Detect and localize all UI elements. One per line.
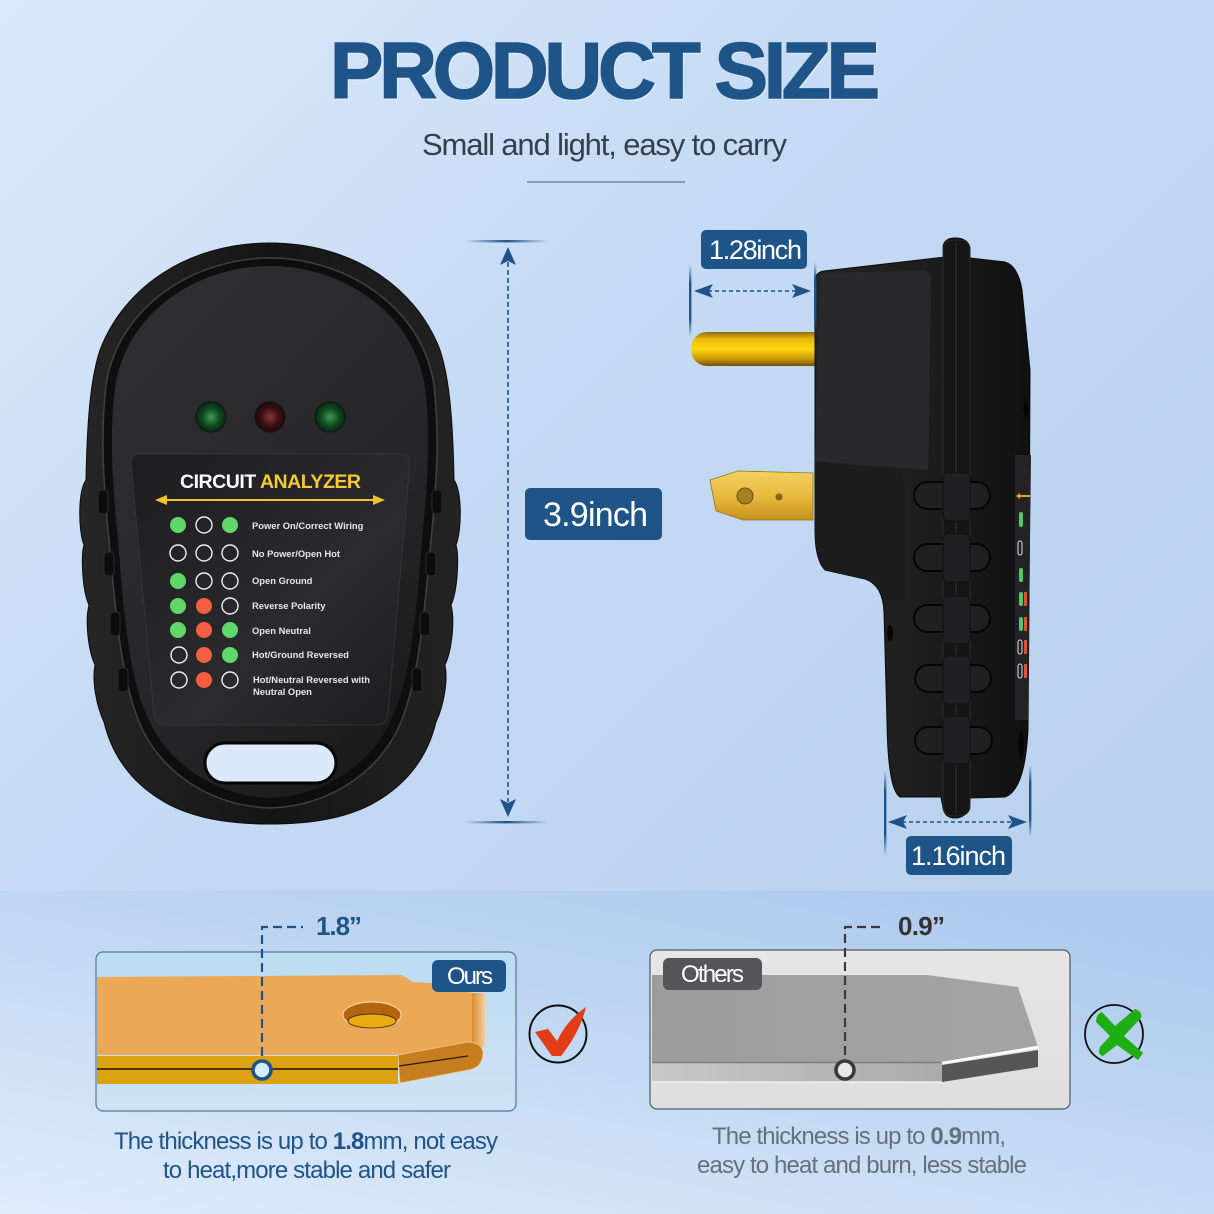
status row labels: Power On/Correct Wiring: [252, 520, 364, 531]
others panel frame: [650, 950, 1070, 1109]
thin blade marker: [836, 1061, 854, 1079]
thin blade leader line: [845, 927, 885, 1055]
height badge: [525, 488, 662, 540]
front face: [112, 266, 428, 798]
flange tabs over pills: [943, 473, 970, 764]
background: lower comparison band: [0, 891, 1214, 1214]
thickness value: 1.8”: [316, 911, 362, 941]
icon: check mark: [530, 1006, 586, 1062]
side body: [815, 238, 1030, 818]
status row labels: Reverse Polarity: [252, 600, 326, 611]
depth badge: 1.16inch: [911, 841, 1006, 871]
side rib tabs: [98, 490, 442, 692]
yellow double arrow: [155, 495, 385, 505]
indicator LEDs: [196, 402, 345, 432]
ours badge: Ours: [447, 963, 493, 990]
pin length badge: 1.28inch: [709, 235, 802, 265]
panel: ours comparison: [96, 911, 516, 1111]
label panel: [131, 454, 410, 725]
lower neck shading: [815, 461, 905, 600]
others badge: [663, 958, 762, 990]
caption: ours: to heat,more stable and safer: [163, 1157, 451, 1184]
body screw holes: [887, 402, 1028, 759]
others badge: Others: [681, 961, 744, 988]
background: upper section: [0, 0, 1214, 891]
label sliver: [1015, 455, 1031, 720]
grip pills: [914, 482, 992, 754]
caption: others: The thickness is up to 0.9mm,: [712, 1123, 1006, 1150]
thickness marker: [253, 1061, 271, 1079]
caption: ours: The thickness is up to 1.8mm, not easy: [114, 1128, 498, 1155]
height badge: 3.9inch: [543, 496, 648, 534]
caption: others: [697, 1123, 1027, 1179]
thin blade value: 0.9”: [898, 911, 945, 941]
icon: cross mark: [1085, 1005, 1143, 1063]
title: PRODUCT SIZE: [330, 26, 880, 115]
front view of circuit analyzer: [80, 243, 460, 824]
status row labels: Open Ground: [252, 575, 313, 586]
depth badge: [906, 836, 1012, 875]
caption: others: easy to heat and burn, less stable: [697, 1152, 1027, 1179]
status row labels: Neutral Open: [253, 686, 312, 697]
body depth dimension: [884, 765, 1031, 875]
ours badge: [432, 960, 506, 992]
status row labels: [252, 520, 370, 697]
round gold pin: [691, 332, 816, 366]
status row labels: Open Neutral: [252, 625, 311, 636]
copper blade image: [97, 975, 485, 1084]
status row dots: [170, 517, 238, 688]
ours panel frame: [96, 952, 516, 1111]
plug block: [815, 271, 931, 470]
subtitle: Small and light, easy to carry: [422, 127, 788, 162]
panel: others comparison: [650, 911, 1070, 1109]
caption: ours: [114, 1128, 498, 1184]
status row labels: No Power/Open Hot: [252, 548, 340, 559]
hanging slot: [205, 743, 336, 783]
height dimension: [465, 240, 662, 823]
flange band: [943, 240, 970, 816]
raised ridge and front face: [103, 258, 437, 808]
device outer shell: [80, 243, 460, 824]
thickness leader line: [262, 927, 303, 1056]
status row labels: Hot/Ground Reversed: [252, 649, 349, 660]
side view of circuit analyzer: [691, 238, 1031, 818]
label heading: CIRCUIT ANALYZER: [180, 471, 361, 493]
flat gold blade: [710, 471, 813, 520]
pin length dimension: [689, 230, 816, 337]
status row labels: Hot/Neutral Reversed with: [253, 674, 370, 685]
grey blade image: [652, 975, 1038, 1082]
